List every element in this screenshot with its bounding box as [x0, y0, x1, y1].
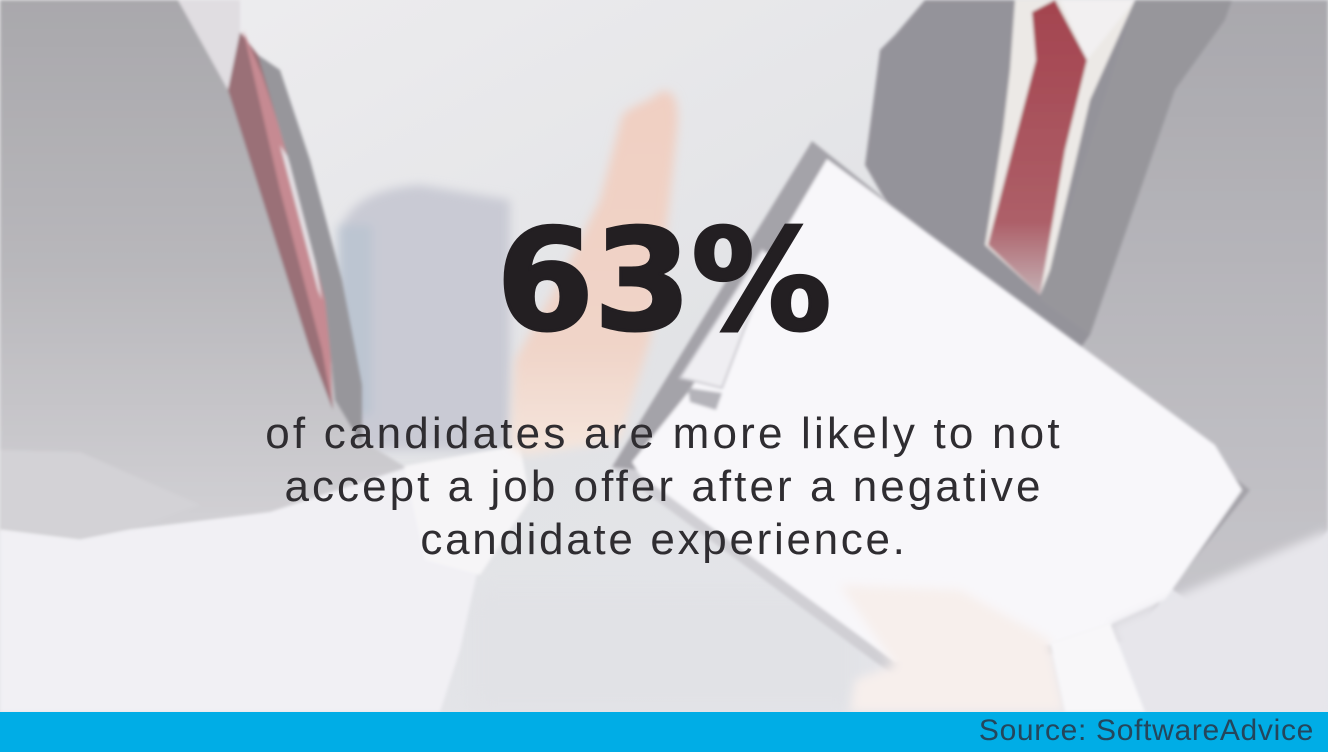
left shirt cuff and sleeve	[0, 445, 530, 712]
left suit	[0, 0, 410, 540]
blurred building	[338, 185, 510, 450]
clipboard	[612, 141, 1250, 680]
description text: candidate experience.	[420, 515, 908, 564]
description text: accept a job offer after a negative	[284, 462, 1044, 511]
source text: Source: SoftwareAdvice	[979, 714, 1314, 747]
big statistic: 63%	[496, 200, 832, 363]
lower right hand and sleeve	[840, 530, 1328, 712]
source footer bar	[0, 712, 1328, 752]
description text: of candidates are more likely to not	[265, 409, 1063, 458]
hand	[510, 91, 678, 455]
description text	[265, 409, 1063, 564]
right suit	[865, 0, 1328, 640]
